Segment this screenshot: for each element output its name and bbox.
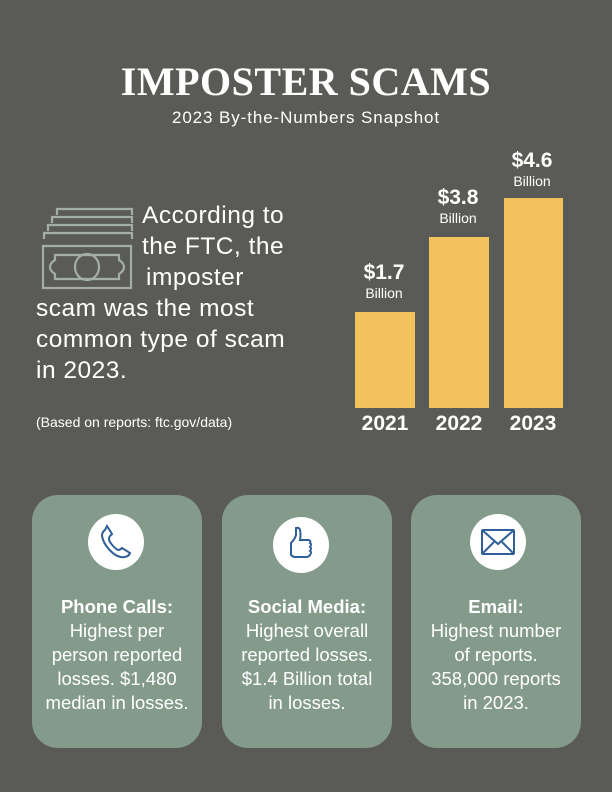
panel: phone calls: losses. $1,480 bbox=[57, 668, 177, 689]
subtitle: 2023 By-the-Numbers Snapshot bbox=[172, 108, 440, 127]
panel: phone calls: median in losses. bbox=[46, 692, 188, 713]
text block: FTC statement: common type of scam bbox=[36, 326, 285, 353]
bar chart bbox=[355, 149, 563, 435]
panel: phone calls: Phone Calls: bbox=[61, 596, 173, 617]
icon: phone bbox=[88, 514, 144, 570]
text block: FTC statement: imposter bbox=[146, 264, 244, 291]
bar chart: 2022 bbox=[436, 412, 482, 435]
panel: phone calls bbox=[32, 495, 202, 748]
icon: money stack bbox=[42, 208, 134, 290]
panel: social media: in losses. bbox=[268, 692, 346, 713]
panel: email: 358,000 reports bbox=[431, 668, 561, 689]
panel: social media: reported losses. bbox=[241, 644, 373, 665]
source note: (Based on reports: ftc.gov/data) bbox=[36, 414, 232, 430]
panel: email: Highest number bbox=[431, 620, 561, 641]
text block: FTC statement: the FTC, the bbox=[142, 233, 284, 260]
bar chart: Billion bbox=[365, 285, 403, 301]
panel: social media: Highest overall bbox=[246, 620, 368, 641]
text block: FTC statement: According to bbox=[142, 202, 284, 229]
bar chart: 2023 bbox=[510, 412, 556, 435]
panel: email: Email: bbox=[468, 596, 524, 617]
panel: social media bbox=[222, 495, 392, 748]
icon: thumbs up bbox=[273, 517, 329, 573]
title: IMPOSTER SCAMS bbox=[121, 59, 491, 104]
bar chart: 2021 bbox=[362, 412, 408, 435]
text block: FTC statement bbox=[36, 202, 285, 384]
panel: phone calls: person reported bbox=[52, 644, 182, 665]
bar chart: Billion bbox=[513, 173, 551, 189]
panel: phone calls: Highest per bbox=[70, 620, 164, 641]
text block: FTC statement: scam was the most bbox=[36, 295, 254, 322]
bar chart: $1.7 bbox=[364, 261, 404, 284]
panel: email: in 2023. bbox=[463, 692, 529, 713]
panel: email: of reports. bbox=[454, 644, 538, 665]
panel: email bbox=[411, 495, 581, 748]
bar chart: $3.8 bbox=[438, 186, 478, 209]
bar chart: $4.6 bbox=[512, 149, 552, 172]
icon: envelope bbox=[470, 514, 526, 570]
panel: social media: $1.4 Billion total bbox=[242, 668, 372, 689]
text block: FTC statement: in 2023. bbox=[36, 357, 127, 384]
bar chart: Billion bbox=[439, 210, 477, 226]
panel: social media: Social Media: bbox=[248, 596, 366, 617]
